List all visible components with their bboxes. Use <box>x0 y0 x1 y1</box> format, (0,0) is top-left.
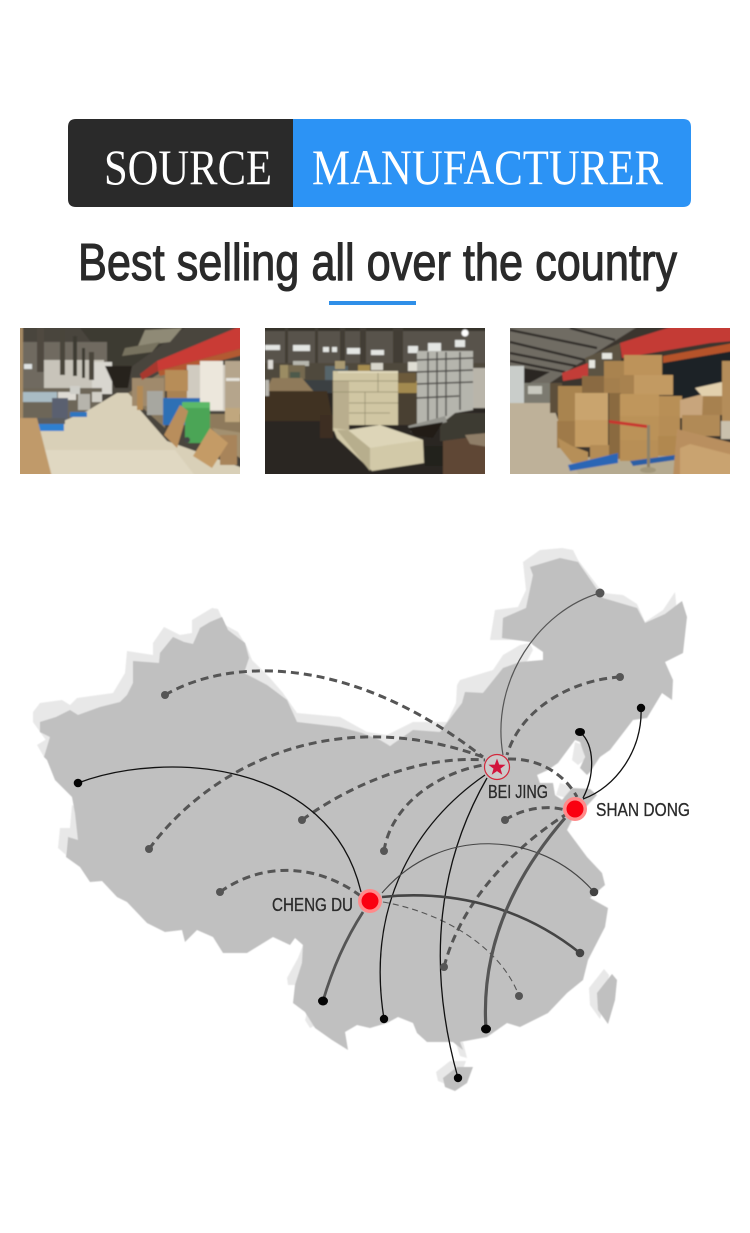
heading underline <box>329 301 416 305</box>
banner word: source: SOURCE <box>104 139 272 195</box>
gray city dots <box>145 588 624 1000</box>
photo: cream boxes on pallet <box>265 328 485 474</box>
map shadow <box>33 548 680 1085</box>
label: Shan Dong: SHAN DONG <box>596 799 690 820</box>
marker: Beijing star <box>484 754 510 780</box>
header banner <box>68 119 691 207</box>
banner word: manufacturer: MANUFACTURER <box>312 139 664 195</box>
marker: Shandong <box>563 797 587 821</box>
dashed routes <box>149 671 620 967</box>
label: Cheng Du: CHENG DU <box>272 894 353 915</box>
map of China <box>33 548 687 1091</box>
label: Bei Jing: BEI JING <box>488 781 548 802</box>
photo: warehouse aisle <box>20 328 240 474</box>
map landmass <box>40 558 687 1091</box>
marker: Chengdu <box>358 889 382 913</box>
black city dots <box>74 704 645 1082</box>
photo: stacked cartons <box>510 328 730 474</box>
solid routes <box>78 593 641 1078</box>
thin dashed route <box>383 902 519 996</box>
